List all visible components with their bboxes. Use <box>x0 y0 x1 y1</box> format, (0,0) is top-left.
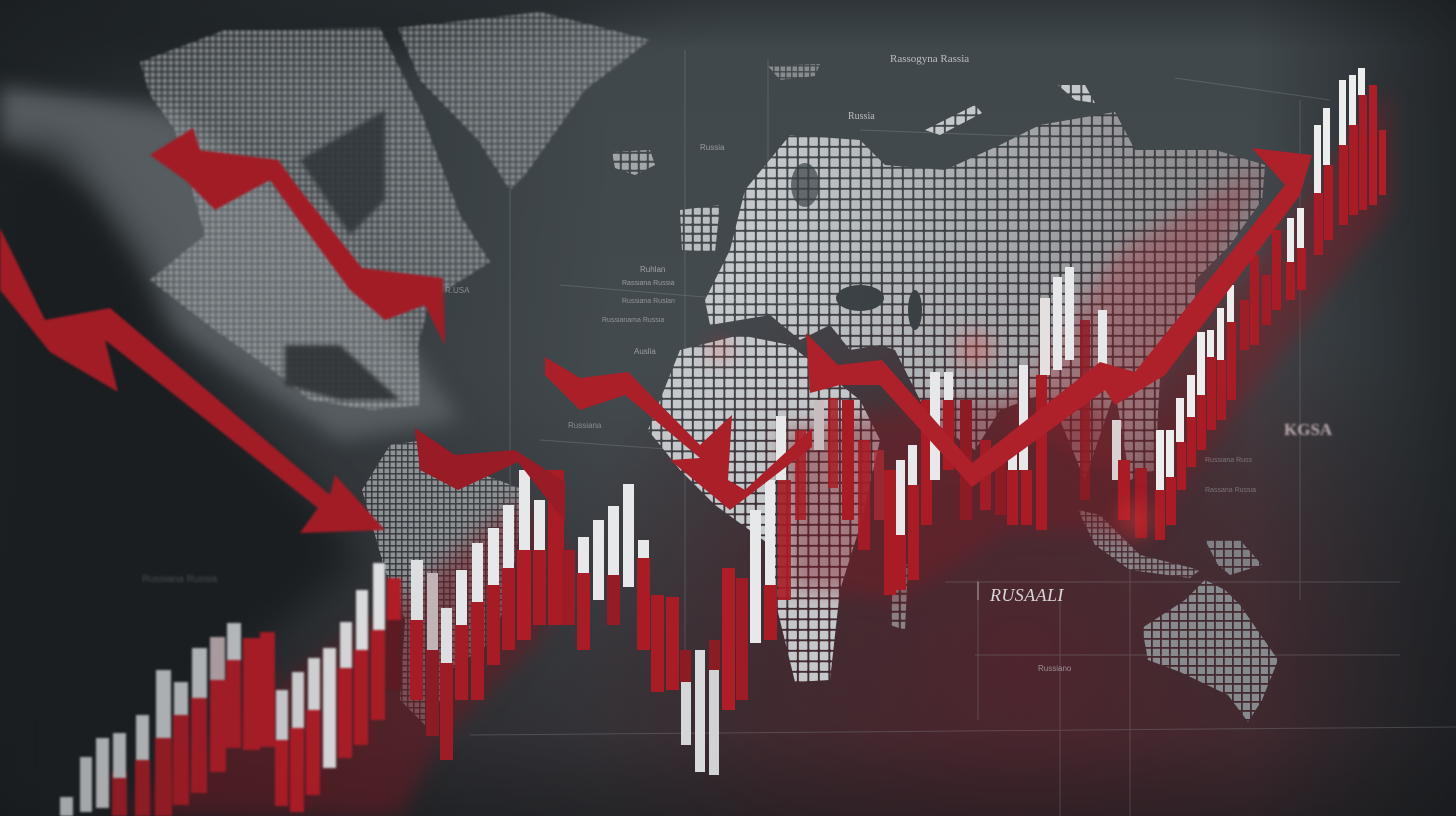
label: atlantic note: Rassiana Russia <box>622 280 675 287</box>
map: iberia <box>680 205 720 252</box>
arrow: large left falling <box>0 228 385 533</box>
label: west europe: Ruhlan <box>640 265 665 274</box>
label: right notes one: Russiana Russ <box>1205 457 1253 464</box>
label: top region: Rassogyna Rassia <box>890 53 969 65</box>
label: caribbean: Russiana <box>568 421 602 430</box>
label: right notes two: Rassana Russia <box>1205 487 1256 494</box>
map: red wash on asia <box>1000 170 1260 480</box>
label: upper centre: Russia <box>848 111 875 122</box>
label: atlantic note two: Russiana Ruslan <box>622 298 675 305</box>
glow: red highlights <box>710 334 1153 538</box>
map: dark shadow over north america <box>285 345 400 400</box>
label: lower left blurred: Russiana Russia <box>142 574 217 585</box>
label: russaali: RUSAALI <box>989 585 1064 605</box>
map: dark bay <box>300 110 385 235</box>
map: indonesia islands <box>1078 510 1200 578</box>
map: svalbard dots <box>768 64 820 80</box>
map: south america <box>362 440 525 730</box>
label: right large: KGSA <box>1284 420 1333 439</box>
map: greenland <box>398 12 650 190</box>
map: north america <box>140 28 490 410</box>
map: arctic arc islands <box>925 105 982 135</box>
map: africa <box>648 335 880 682</box>
label: north atlantic: Russia <box>700 143 725 152</box>
label: west africa: Auslia <box>634 347 656 356</box>
map: eastward shading <box>705 112 1265 480</box>
map: new guinea <box>1205 540 1262 575</box>
map labels <box>142 53 1333 673</box>
candlesticks: centre group <box>410 372 954 775</box>
grid lines <box>470 50 1456 816</box>
arrow: top left falling <box>150 128 445 345</box>
dark red fill behind candles <box>120 90 1390 816</box>
arrow: right rising <box>806 148 1312 487</box>
label: north america side: R.USA <box>445 286 470 295</box>
label: lower centre: Russiano <box>1038 664 1072 673</box>
arrow: centre falling then rising <box>545 357 812 510</box>
map: iceland <box>612 150 655 175</box>
map: madagascar <box>890 560 908 630</box>
candlesticks: lower left group <box>60 563 401 816</box>
map: arctic islands <box>1058 85 1095 103</box>
divider tick beside label <box>977 582 979 600</box>
map: australia <box>1142 580 1278 722</box>
map: europe and asia <box>705 112 1265 480</box>
world map <box>140 12 1278 730</box>
label: atlantic note three: Russianama Russia <box>602 317 664 324</box>
arrow: short centre left <box>415 428 565 522</box>
candlesticks: right group <box>960 68 1386 540</box>
map: inland sea gaps <box>791 163 922 330</box>
